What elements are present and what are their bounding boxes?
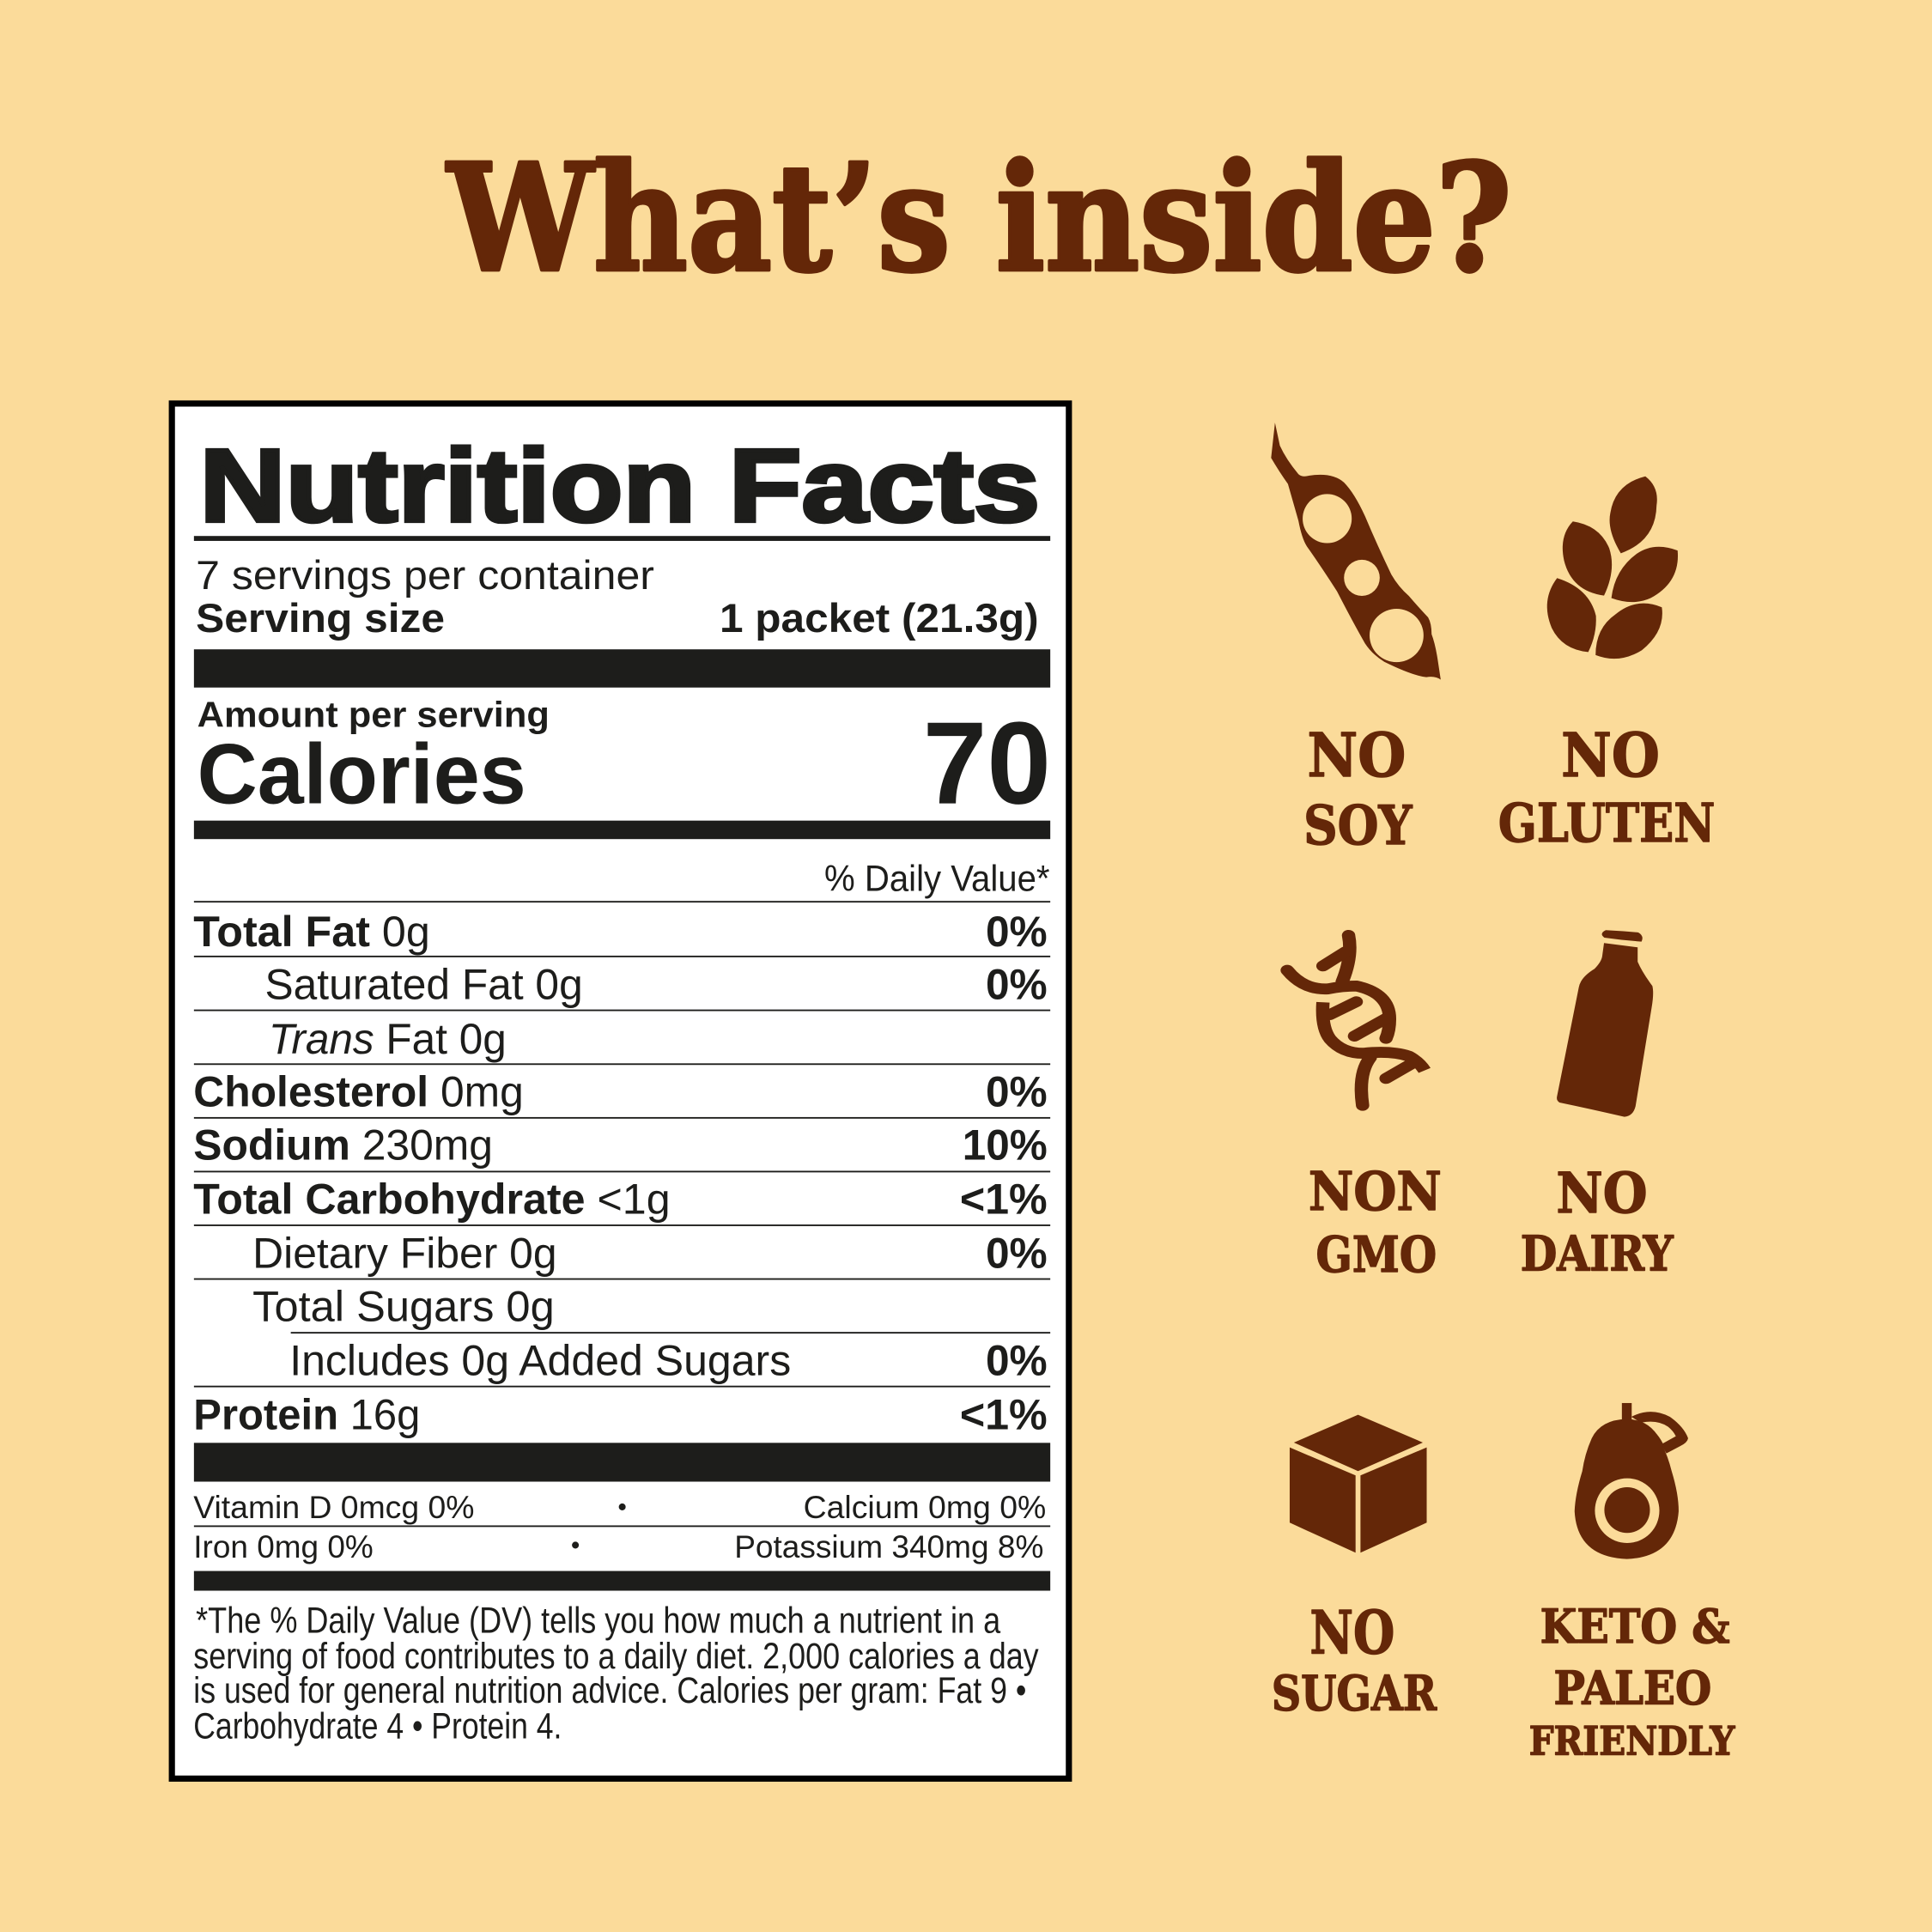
row: total carbohydrate: <1% — [960, 1175, 1048, 1223]
row: protein — [193, 1391, 1048, 1439]
row: added sugars — [289, 1336, 1048, 1384]
row: cholesterol — [193, 1068, 1048, 1116]
row: saturated fat — [265, 961, 1048, 1009]
row: iron and potassium: Iron 0mg 0% — [193, 1528, 374, 1564]
icon: sugar cube — [1290, 1415, 1427, 1552]
label: no sugar: SUGAR — [1272, 1666, 1437, 1722]
row: protein: Protein 16g — [193, 1391, 420, 1439]
row: vitamin D and calcium: Vitamin D 0mcg 0% — [193, 1489, 474, 1525]
row: total carbohydrate: Total Carbohydrate <1g — [193, 1175, 671, 1223]
serving size — [196, 596, 1039, 641]
row: dietary fiber — [252, 1230, 1048, 1278]
footnote: *The % Daily Value (DV) tells you how much a nutrient in a — [196, 1600, 1000, 1641]
label: no gluten: NO — [1561, 720, 1660, 791]
row: vitamin D and calcium: Calcium 0mg 0% — [804, 1489, 1046, 1525]
amount per serving: Amount per serving — [197, 695, 550, 735]
row: total sugars: Total Sugars 0g — [252, 1282, 555, 1330]
label: no dairy: NO — [1556, 1161, 1648, 1226]
row: total carbohydrate — [193, 1175, 1048, 1223]
label: no soy: SOY — [1303, 793, 1413, 857]
label: non gmo: GMO — [1316, 1225, 1437, 1284]
row: iron and potassium — [193, 1528, 1043, 1564]
row: saturated fat: Saturated Fat 0g — [265, 961, 583, 1009]
icon: soybean pod — [1271, 422, 1441, 679]
row: vitamin D and calcium — [193, 1489, 1046, 1525]
serving size: 1 packet (21.3g) — [720, 596, 1039, 641]
label: non gmo: NON — [1309, 1160, 1442, 1223]
icon: dna — [1287, 935, 1425, 1105]
row: sodium: Sodium 230mg — [193, 1121, 493, 1169]
calories: 70 — [923, 698, 1051, 829]
row: total fat: Total Fat 0g — [193, 908, 430, 956]
footnote — [193, 1600, 1039, 1747]
calories — [197, 698, 1051, 829]
row: trans fat: Trans Fat 0g — [269, 1015, 507, 1063]
footnote: Carbohydrate 4 • Protein 4. — [193, 1706, 562, 1747]
row: dietary fiber: Dietary Fiber 0g — [252, 1230, 557, 1278]
row: saturated fat: 0% — [986, 961, 1048, 1009]
label: no gluten — [1498, 720, 1715, 854]
label: no soy — [1303, 720, 1413, 857]
row: cholesterol: 0% — [986, 1068, 1048, 1116]
label: no sugar: NO — [1309, 1599, 1394, 1668]
serving size: Serving size — [196, 596, 445, 641]
row: added sugars: Includes 0g Added Sugars — [289, 1336, 791, 1384]
title: What’s inside? — [446, 131, 1512, 305]
label: no dairy: DAIRY — [1521, 1225, 1674, 1282]
label: keto and paleo friendly: FRIENDLY — [1529, 1717, 1735, 1764]
heading: Nutrition Facts: Nutrition Facts — [199, 428, 1040, 544]
row: protein: <1% — [960, 1391, 1048, 1439]
label: keto and paleo friendly: PALEO — [1553, 1662, 1711, 1716]
row: iron and potassium: Potassium 340mg 8% — [734, 1528, 1043, 1564]
icon: avocado — [1575, 1403, 1688, 1559]
label: no dairy — [1521, 1161, 1674, 1282]
row: sodium — [193, 1121, 1048, 1169]
row: total fat: 0% — [986, 908, 1048, 956]
row: sodium: 10% — [963, 1121, 1048, 1169]
label: no sugar — [1272, 1599, 1437, 1722]
row: cholesterol: Cholesterol 0mg — [193, 1068, 524, 1116]
label: no gluten: GLUTEN — [1498, 792, 1715, 854]
row: total fat — [193, 908, 1048, 956]
footnote: serving of food contributes to a daily diet. 2,000 calories a day — [193, 1636, 1039, 1677]
footnote: is used for general nutrition advice. Calories per gram: Fat 9 • — [193, 1670, 1026, 1711]
row: added sugars: 0% — [986, 1336, 1048, 1384]
icon: bottle — [1557, 930, 1653, 1117]
daily value header: % Daily Value* — [824, 858, 1050, 899]
label: keto and paleo friendly: KETO & — [1540, 1599, 1730, 1654]
label: no soy: NO — [1307, 720, 1406, 791]
icon: wheat — [1547, 477, 1678, 659]
panel: nutrition facts — [172, 404, 1069, 1778]
label: non gmo — [1309, 1160, 1442, 1284]
calories: Calories — [197, 726, 526, 822]
label: keto and paleo friendly — [1529, 1599, 1735, 1764]
servings per container: 7 servings per container — [196, 553, 654, 598]
row: dietary fiber: 0% — [986, 1230, 1048, 1278]
